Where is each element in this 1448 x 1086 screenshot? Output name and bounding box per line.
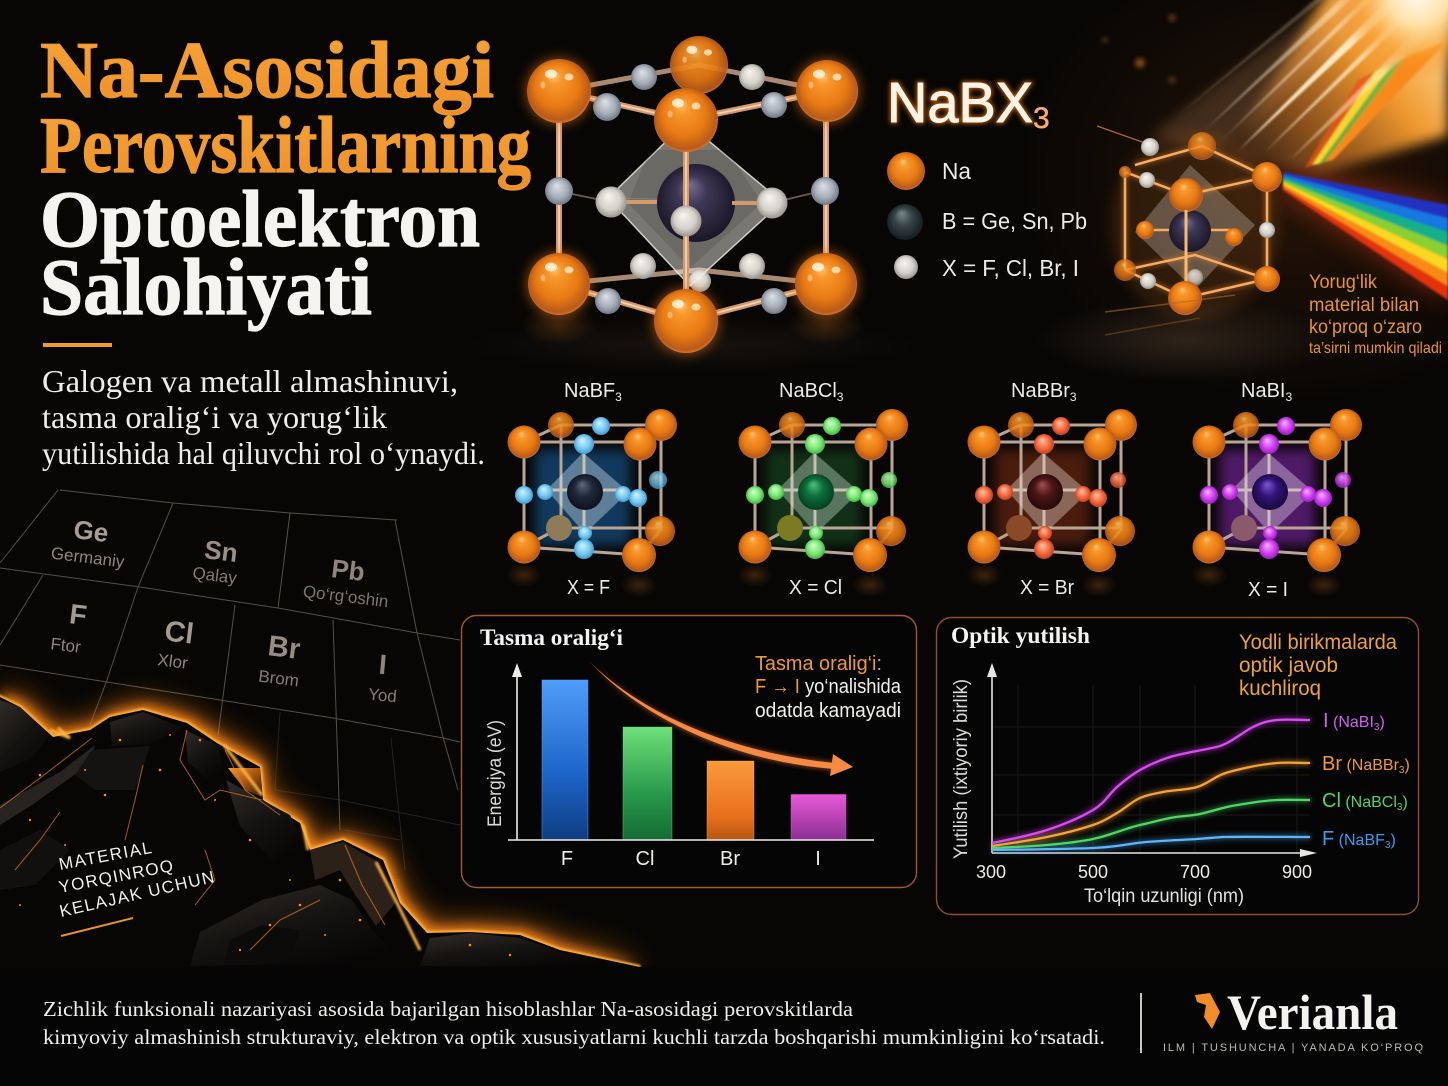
- label: X = Cl: X = Cl: [789, 577, 842, 599]
- element name: Yod: Yod: [367, 685, 398, 706]
- curve: Br (NaBBr3): [992, 763, 1310, 846]
- element: Sn: Sn: [203, 534, 239, 568]
- front bonds: [559, 91, 827, 321]
- line chart: Yutilish (ixtiyoriy birlik): [951, 679, 972, 859]
- light caption: ko‘proq o‘zaro: [1309, 317, 1422, 338]
- label: NaBCl3: NaBCl: [779, 380, 837, 402]
- title: Na-Asosidagi: [40, 27, 494, 115]
- back bonds: [559, 65, 827, 284]
- bar chart: F: [561, 848, 573, 870]
- series labels: Br (NaBBr: [1322, 753, 1399, 775]
- caption on rock: KELAJAK UCHUN: [58, 867, 216, 921]
- annotation: Tasma oralig‘i:: [755, 653, 882, 675]
- crystal variant: NaBI3: [1191, 380, 1362, 601]
- legend: [887, 152, 1087, 281]
- bar chart: I: [815, 848, 821, 870]
- label: NaBCl3: 3: [837, 390, 844, 404]
- line chart: To‘lqin uzunligi (nm): [1084, 886, 1244, 907]
- label: NaBBr3: 3: [1070, 390, 1077, 404]
- series labels: Cl (NaBCl: [1322, 790, 1397, 812]
- legend: B: B = Ge, Sn, Pb: [942, 208, 1087, 234]
- bar chart: Br: [720, 848, 740, 870]
- label: X = I: X = I: [1248, 579, 1288, 601]
- annotation: kuchliroq: [1239, 677, 1321, 700]
- bar chart: Energiya (eV): [485, 720, 506, 827]
- annotation: optik javob: [1239, 654, 1338, 677]
- crystal variant: NaBF3: [506, 380, 677, 599]
- curve: Cl (NaBCl3): [992, 800, 1310, 848]
- center atom: [657, 164, 735, 242]
- formula NaBX3: NaBX: [887, 71, 1033, 135]
- formula NaBX3: 3: [1033, 102, 1050, 135]
- main crystal structure: [526, 36, 859, 354]
- label: NaBI3: 3: [1285, 390, 1292, 404]
- label: X = F: X = F: [567, 577, 610, 599]
- logo: Verianla: [1163, 984, 1423, 1054]
- element name: Germaniy: Germaniy: [50, 544, 126, 572]
- halide atoms: [545, 92, 839, 314]
- series labels: ): [1379, 714, 1385, 731]
- bar chart: Cl: [636, 848, 654, 870]
- annotation: F → I yo‘nalishida: [755, 676, 902, 698]
- series labels: ): [1390, 832, 1396, 849]
- footer text: kimyoviy almashinish strukturaviy, elektron va optik xususiyatlarni kuchli tarzda boshqarishi mumkinligini ko‘rsatadi.: [43, 1025, 1105, 1049]
- subtitle: tasma oralig‘i va yorug‘lik: [42, 399, 387, 435]
- element name: Brom: Brom: [257, 667, 300, 690]
- element name: Qo‘rg‘oshin: Qo‘rg‘oshin: [302, 582, 390, 611]
- footer text: Zichlik funksionali nazariyasi asosida bajarilgan hisoblashlar Na-asosidagi perovskitlarda: [43, 997, 854, 1021]
- title: Optoelektron: [40, 176, 480, 264]
- line chart: [951, 663, 1410, 907]
- crystal variant: NaBBr3: [966, 380, 1137, 599]
- caption on rock: YORQINROQ: [57, 856, 175, 897]
- curve: F (NaBF3): [992, 837, 1310, 850]
- subtitle: yutilishida hal qiluvchi rol o‘ynaydi.: [42, 435, 485, 471]
- caption on rock: [57, 838, 216, 936]
- title: [40, 27, 531, 332]
- series labels: ): [1402, 794, 1408, 811]
- octahedron: [608, 122, 782, 286]
- series labels: 3: [1374, 722, 1380, 733]
- line chart: 700: [1180, 862, 1210, 882]
- label: X = Br: X = Br: [1020, 577, 1074, 599]
- small glowing crystal: [1105, 130, 1282, 335]
- sodium atoms: [526, 46, 859, 354]
- light caption: [1309, 272, 1442, 357]
- element: I: I: [378, 649, 388, 680]
- legend: Na: Na: [942, 158, 971, 184]
- periodic table background: [0, 490, 460, 880]
- line chart: 500: [1078, 862, 1108, 882]
- label: NaBBr3: NaBBr: [1011, 380, 1070, 402]
- label: NaBF3: 3: [615, 390, 622, 404]
- line chart: 300: [976, 862, 1006, 882]
- formula NaBX3: NaBX: [887, 71, 1033, 135]
- panel: optical absorption chart: [936, 618, 1418, 914]
- element: Pb: Pb: [330, 553, 366, 587]
- title: Perovskitlarning: [40, 102, 531, 190]
- trend arrow: [590, 662, 853, 776]
- logo: Verianla: Verianla: [1227, 984, 1398, 1040]
- glowing rock: [0, 689, 644, 967]
- panel: band gap chart: [462, 616, 916, 888]
- panel heading: Tasma oralig‘i: Tasma oralig‘i: [480, 625, 624, 650]
- element: Cl: Cl: [163, 615, 195, 651]
- series labels: I (NaBI: [1323, 710, 1374, 732]
- light caption: material bilan: [1309, 295, 1419, 316]
- light beam and rainbow: [1097, 0, 1448, 300]
- annotation: [1239, 631, 1397, 700]
- annotation: odatda kamayadi: [755, 700, 901, 722]
- panel heading: Optik yutilish: Optik yutilish: [951, 623, 1090, 648]
- series labels: ): [1404, 757, 1410, 774]
- light caption: Yorug‘lik: [1309, 272, 1377, 293]
- annotation: [755, 653, 902, 722]
- footer text: [43, 997, 1105, 1049]
- curve: I (NaBI3): [992, 720, 1310, 843]
- subtitle: [42, 363, 485, 471]
- element name: Xlor: Xlor: [157, 650, 189, 673]
- subtitle: Galogen va metall almashinuvi,: [42, 363, 458, 399]
- bar chart: [485, 663, 874, 870]
- label: NaBI3: NaBI: [1241, 380, 1285, 402]
- element: F: F: [68, 598, 89, 631]
- element: Ge: Ge: [72, 514, 110, 548]
- caption on rock: MATERIAL: [57, 838, 153, 874]
- legend: X: X = F, Cl, Br, I: [942, 255, 1079, 281]
- crystal variant: NaBCl3: [737, 380, 908, 599]
- label: NaBF3: NaBF: [564, 380, 615, 402]
- series labels: [1322, 710, 1410, 851]
- annotation: Yodli birikmalarda: [1239, 631, 1397, 654]
- element name: Ftor: Ftor: [50, 634, 82, 657]
- line chart: 900: [1282, 862, 1312, 882]
- legend: Na: [887, 152, 971, 190]
- element: Br: Br: [266, 630, 302, 666]
- footer bar: [0, 967, 1448, 1086]
- logo: Verianla: ILM | TUSHUNCHA | YANADA KO‘PROQ: [1163, 1042, 1423, 1054]
- legend: B: [887, 204, 1087, 240]
- element name: Qalay: Qalay: [191, 563, 238, 588]
- series labels: 3: [1385, 840, 1391, 851]
- series labels: 3: [1399, 765, 1405, 776]
- series labels: 3: [1397, 802, 1403, 813]
- series labels: F (NaBF: [1322, 828, 1385, 850]
- title: Salohiyati: [40, 244, 372, 332]
